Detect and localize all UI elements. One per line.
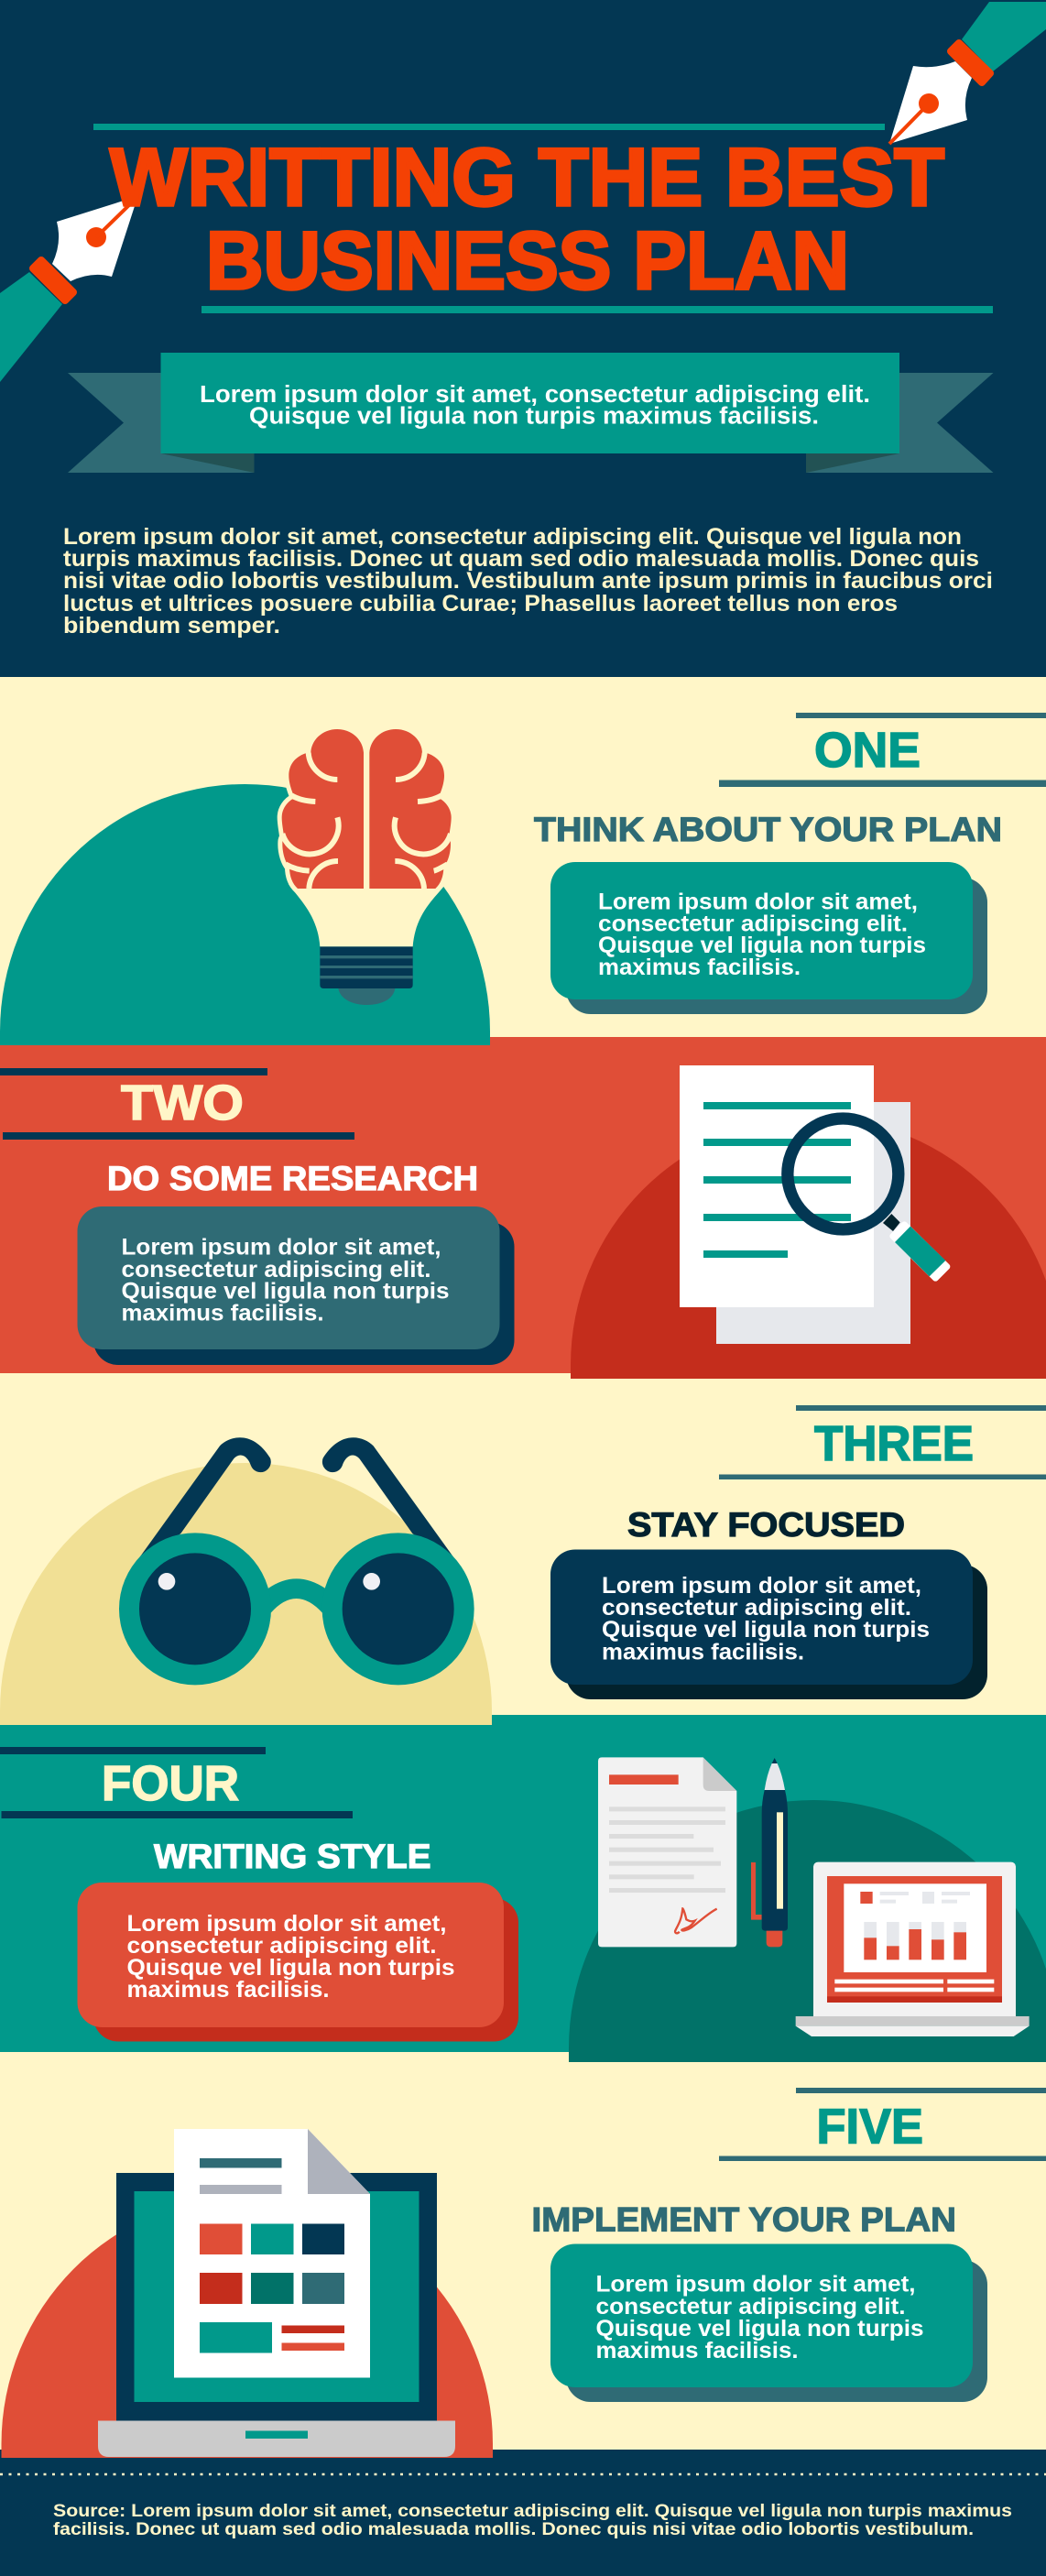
intro paragraph: luctus et ultrices posuere cubilia Curae; Phasellus laoreet tellus non eros xyxy=(63,591,898,617)
panel: step one xyxy=(0,677,1046,1045)
heading: stay focused: STAY FOCUSED xyxy=(627,1506,905,1544)
title xyxy=(110,131,944,306)
text box: step four: Lorem ipsum dolor sit amet, xyxy=(126,1911,447,1937)
title: BUSINESS PLAN xyxy=(206,214,849,306)
intro paragraph: turpis maximus facilisis. Donec ut quam sed odio malesuada mollis. Donec quis xyxy=(63,546,979,572)
panel: header xyxy=(0,0,1046,677)
ribbon banner xyxy=(68,353,993,473)
text box: step four: maximus facilisis. xyxy=(126,1977,330,2003)
text box: step two xyxy=(77,1206,515,1365)
yellow dome xyxy=(0,1463,492,1725)
heading number: one: ONE xyxy=(814,723,921,778)
text box: step five: consectetur adipiscing elit. xyxy=(595,2294,905,2319)
text box: step one: consectetur adipiscing elit. xyxy=(598,911,908,936)
intro paragraph: Lorem ipsum dolor sit amet, consectetur adipiscing elit. Quisque vel ligula non xyxy=(63,524,962,550)
heading number: four: FOUR xyxy=(102,1756,239,1811)
text box: step four: Quisque vel ligula non turpis xyxy=(126,1955,454,1981)
heading: writing style: WRITING STYLE xyxy=(154,1838,430,1875)
icon: document with magnifier xyxy=(680,1065,947,1344)
icon: laptop with document xyxy=(98,2129,455,2457)
text box: step four xyxy=(77,1883,518,2041)
source text: facilisis. Donec ut quam sed odio malesuada mollis. Donec quis nisi vitae odio lobortis vestibulum. xyxy=(53,2519,974,2539)
dark red dome xyxy=(571,1118,1046,1379)
text box: step five: Lorem ipsum dolor sit amet, xyxy=(595,2272,916,2298)
text box: step two: consectetur adipiscing elit. xyxy=(121,1257,430,1283)
text box: step three: Lorem ipsum dolor sit amet, xyxy=(602,1573,921,1599)
text box: step one xyxy=(550,862,987,1014)
panel: footer xyxy=(0,2450,1046,2576)
heading: think about your plan: THINK ABOUT YOUR PLAN xyxy=(534,811,1002,848)
heading: implement your plan: IMPLEMENT YOUR PLAN xyxy=(531,2200,956,2239)
icon: document, pen and laptop chart xyxy=(598,1757,1030,2036)
text box: step five xyxy=(550,2244,987,2402)
title: WRITTING THE BEST xyxy=(110,131,944,223)
title rules xyxy=(93,124,993,313)
panel: step three xyxy=(0,1373,1046,1725)
heading number: five: FIVE xyxy=(817,2100,923,2155)
icon: round glasses xyxy=(119,1437,474,1685)
text box: step three: maximus facilisis. xyxy=(602,1640,804,1665)
red dome xyxy=(2,2197,493,2458)
ribbon banner: Quisque vel ligula non turpis maximus facilisis. xyxy=(249,403,819,429)
intro paragraph xyxy=(63,524,993,639)
text box: step two: maximus facilisis. xyxy=(121,1301,324,1326)
number rules xyxy=(0,1068,354,1140)
text box: step two: Quisque vel ligula non turpis xyxy=(121,1279,449,1304)
heading number: two: TWO xyxy=(121,1075,244,1130)
text box: step five: maximus facilisis. xyxy=(595,2338,799,2363)
dark teal dome xyxy=(569,1800,1046,2062)
number rules xyxy=(719,1405,1046,1479)
teal dome xyxy=(0,784,490,1045)
text box: step three xyxy=(550,1550,987,1699)
number rules xyxy=(0,1747,353,1818)
panel: step four xyxy=(0,1715,1046,2062)
number rules xyxy=(719,2088,1046,2161)
text box: step one: maximus facilisis. xyxy=(598,955,801,980)
text box: step one: Quisque vel ligula non turpis xyxy=(598,933,926,958)
ribbon banner: Lorem ipsum dolor sit amet, consectetur adipiscing elit. xyxy=(200,382,870,408)
source text: Source: Lorem ipsum dolor sit amet, consectetur adipiscing elit. Quisque vel ligula non turpis maximus xyxy=(53,2501,1012,2521)
intro paragraph: bibendum semper. xyxy=(63,613,280,639)
number rules xyxy=(719,713,1046,787)
heading: do some research: DO SOME RESEARCH xyxy=(107,1160,478,1197)
panel: step two xyxy=(0,1037,1046,1379)
panel: step five xyxy=(0,2052,1046,2458)
text box: step three: Quisque vel ligula non turpis xyxy=(602,1617,930,1643)
intro paragraph: nisi vitae odio lobortis vestibulum. Vestibulum ante ipsum primis in faucibus orci xyxy=(63,568,993,594)
text box: step three: consectetur adipiscing elit. xyxy=(602,1595,911,1621)
heading number: three: THREE xyxy=(814,1416,974,1471)
icon: left fountain pen xyxy=(0,201,135,382)
icon: brain light bulb xyxy=(282,729,452,1005)
source text xyxy=(53,2501,1012,2539)
text box: step four: consectetur adipiscing elit. xyxy=(126,1933,436,1959)
text box: step five: Quisque vel ligula non turpis xyxy=(595,2316,923,2341)
text box: step one: Lorem ipsum dolor sit amet, xyxy=(598,889,918,914)
text box: step two: Lorem ipsum dolor sit amet, xyxy=(121,1235,441,1261)
icon: right fountain pen xyxy=(889,2,1046,144)
